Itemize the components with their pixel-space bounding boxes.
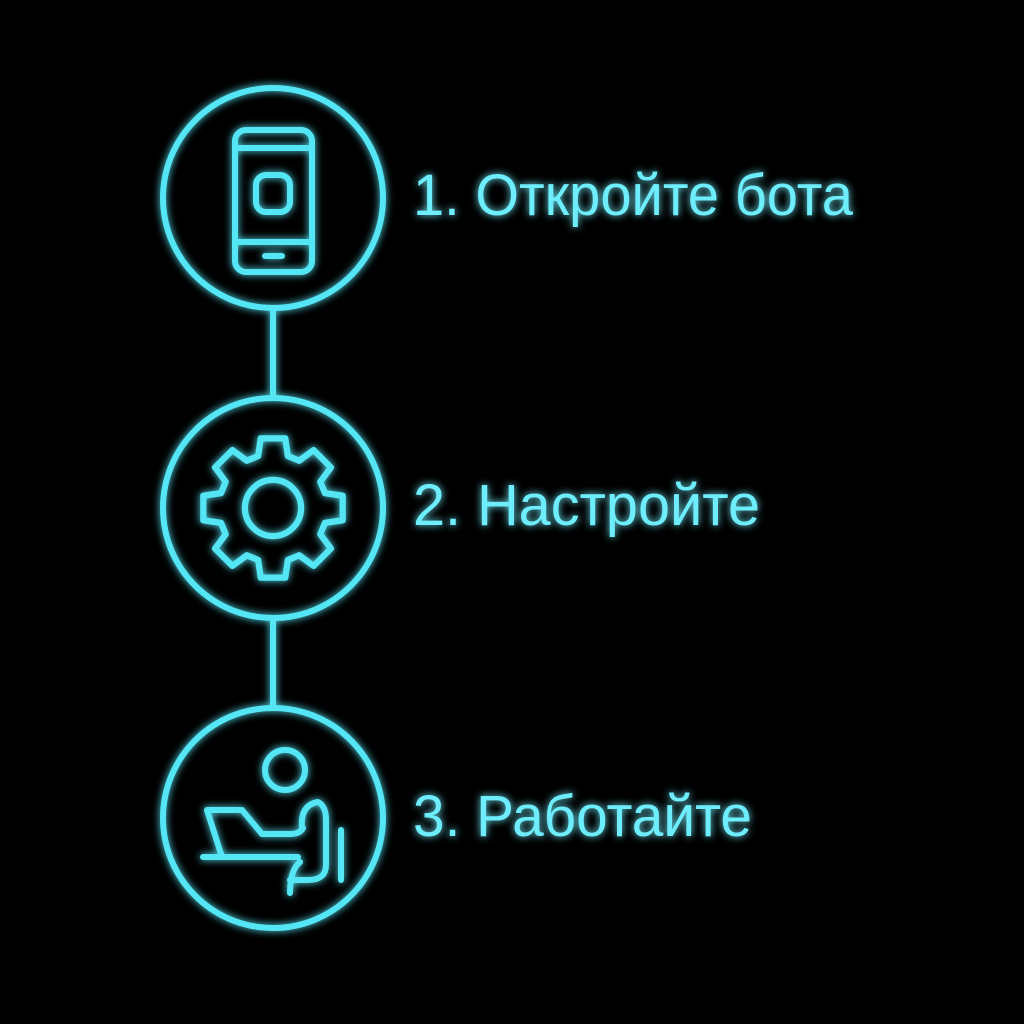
step 2 circle: [163, 398, 383, 618]
connector line 2: [270, 619, 276, 708]
connector line 1: [270, 309, 276, 398]
icon: phone: [235, 130, 312, 272]
step 1 circle: [163, 88, 383, 308]
step 1 label: 1. Откройте бота: [413, 163, 854, 228]
icon: person at laptop: [203, 750, 341, 893]
step 3 circle: [163, 708, 383, 928]
icon: gear: [203, 438, 343, 578]
step 3 label: 3. Работайте: [413, 784, 752, 849]
step 2 label: 2. Настройте: [413, 473, 760, 538]
